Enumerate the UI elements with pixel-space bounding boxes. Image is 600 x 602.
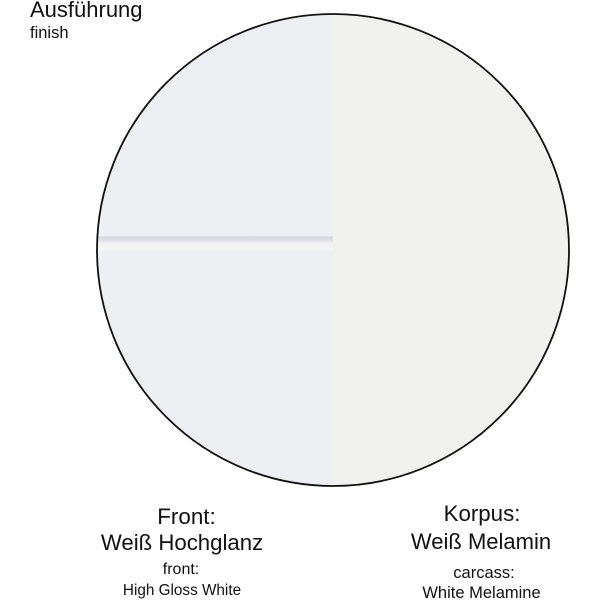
- subheading: finish: finish: [30, 24, 69, 42]
- label: front English: front:: [163, 561, 199, 578]
- label: front German: Front:: [157, 504, 216, 529]
- swatch circle: [96, 13, 570, 487]
- label: carcass German: Korpus:: [444, 501, 520, 526]
- label: front finish German: Weiß Hochglanz: [101, 530, 263, 555]
- label: carcass English: carcass:: [453, 564, 515, 582]
- label: carcass finish German: Weiß Melamin: [411, 529, 551, 554]
- label: carcass finish English: White Melamine: [422, 584, 541, 602]
- label: front finish English: High Gloss White: [123, 582, 241, 599]
